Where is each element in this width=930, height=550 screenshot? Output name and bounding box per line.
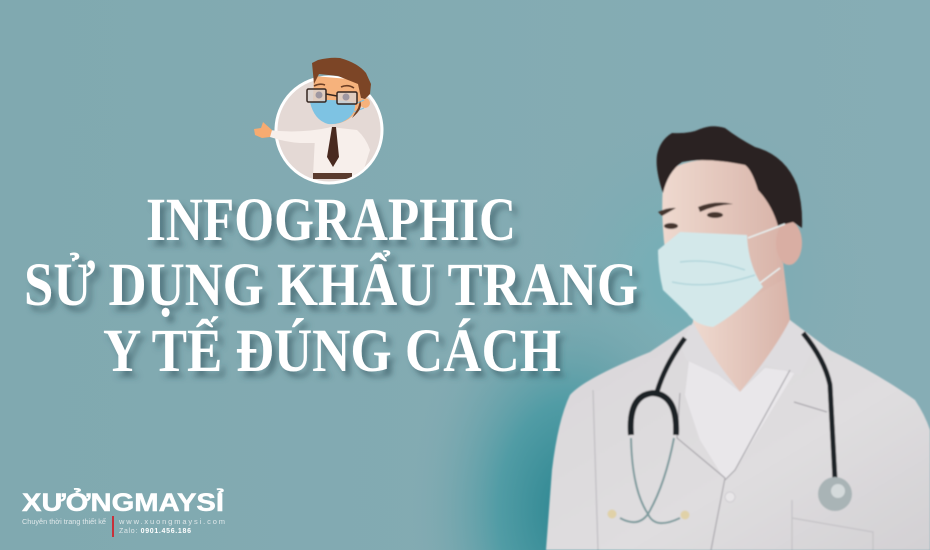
lab coat <box>546 320 930 550</box>
logo phone: Zalo: 0901.456.186 <box>119 528 191 535</box>
ear <box>776 221 802 265</box>
logo divider <box>112 516 114 537</box>
avatar eyebrows <box>314 84 354 88</box>
neck <box>693 262 790 392</box>
cartoon doctor avatar <box>254 58 382 183</box>
avatar shirt and belt <box>313 127 370 179</box>
coat lapel seams <box>593 370 873 550</box>
face mask <box>658 224 785 327</box>
avatar mask <box>310 100 355 124</box>
title line 3: Y TẾ ĐÚNG CÁCH <box>103 316 561 385</box>
logo tagline: Chuyên thời trang thiết kế <box>22 517 106 526</box>
avatar arm <box>269 127 332 143</box>
stethoscope <box>620 333 835 523</box>
avatar circle <box>276 77 382 183</box>
shirt <box>685 352 795 480</box>
eyes and eyebrows <box>658 203 733 229</box>
logo website: www.xuongmaysi.com <box>118 517 225 526</box>
hair <box>657 126 802 228</box>
coat button <box>725 492 735 502</box>
avatar hair <box>312 58 371 99</box>
title <box>24 186 638 385</box>
logo wordmark: XƯỞNGMAYSỈ <box>22 487 224 517</box>
title line 2: SỬ DỤNG KHẨU TRANG <box>24 250 638 319</box>
avatar tie <box>327 127 339 167</box>
avatar hand <box>254 122 272 138</box>
doctor photo <box>546 126 930 550</box>
title line 1: INFOGRAPHIC <box>146 186 516 254</box>
stethoscope ear tips <box>608 510 690 520</box>
avatar beard <box>352 101 361 118</box>
logo <box>22 487 225 537</box>
head and face <box>662 159 783 322</box>
avatar head <box>313 76 362 124</box>
avatar glasses <box>307 89 357 104</box>
stethoscope chest piece <box>818 477 852 511</box>
shirt collar <box>680 320 815 392</box>
